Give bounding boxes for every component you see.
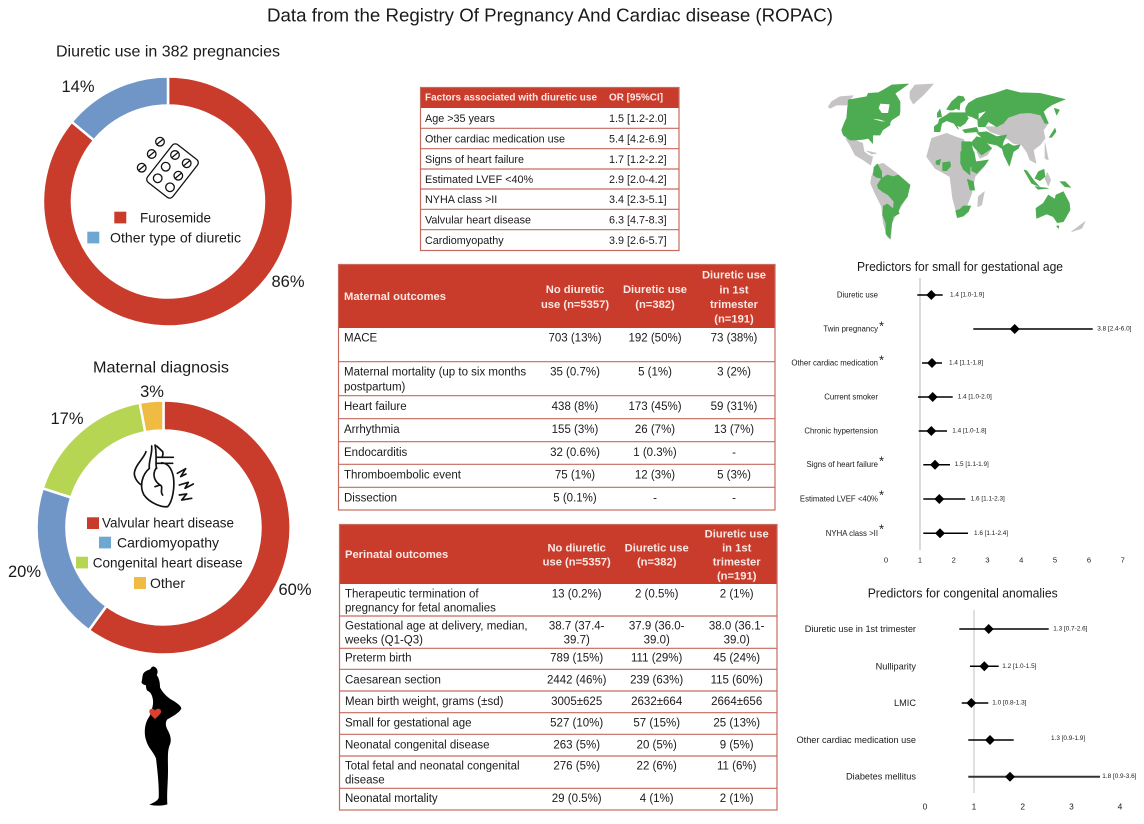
table header: (n=191) (714, 314, 754, 326)
table rows: 29 (0.5%) (552, 793, 602, 805)
forest plot rows: Nulliparity (876, 661, 916, 671)
table rows: 22 (6%) (637, 761, 677, 773)
table rows: 2442 (46%) (547, 674, 607, 686)
forest plot rows: 1.6 [1.1-2.4] (974, 530, 1008, 537)
x axis labels: 1 (972, 802, 977, 812)
table header: trimester (710, 299, 759, 311)
table rows: 12 (3%) (635, 470, 675, 482)
table rows: Signs of heart failure (425, 154, 524, 166)
table rows: NYHA class >II (425, 194, 497, 206)
label: 60%: 60% (278, 581, 312, 599)
table rows: Neonatal congenital disease (345, 739, 490, 751)
panel: predictors for small for gestational age (791, 260, 1132, 564)
forest plot rows: * (879, 352, 884, 368)
forest plot rows: NYHA class >II (826, 529, 878, 538)
table rows: 2.9 [2.0-4.2] (609, 174, 667, 186)
table rows: 39.0) (724, 634, 750, 646)
reference line at 1 (973, 610, 975, 793)
forest plot rows: 1.0 [0.8-1.3] (992, 700, 1027, 706)
table rows: 5 (3%) (717, 470, 751, 482)
table rows: 13 (0.2%) (552, 588, 602, 600)
forest plot rows: * (879, 318, 884, 334)
forest plot rows: 3.8 [2.4-6.0] (1097, 326, 1132, 332)
forest plot rows: 1.4 [1.0-2.0] (958, 394, 992, 400)
table rows: Preterm birth (345, 653, 411, 665)
table: perinatal outcomes (339, 524, 777, 810)
table rows: Mean birth weight, grams (±sd) (345, 696, 504, 708)
table rows: weeks (Q1-Q3) (344, 634, 423, 646)
label: 14%: 14% (61, 78, 95, 96)
table rows: disease (345, 775, 385, 787)
table rows: Heart failure (344, 401, 407, 413)
x axis labels: 4 (1019, 556, 1023, 564)
forest plot rows: Diabetes mellitus (846, 772, 916, 782)
heading: diuretic use: Diuretic use in 382 pregnancies (56, 44, 280, 60)
world map: participating countries (828, 84, 1085, 239)
table header: Diuretic use (625, 542, 689, 554)
table rows: 438 (8%) (552, 401, 598, 413)
table rows: 13 (7%) (714, 424, 754, 436)
table: maternal outcomes (338, 264, 775, 510)
x axis labels: 2 (952, 556, 956, 564)
table rows: 38.0 (36.1- (709, 621, 765, 633)
table rows (344, 588, 765, 805)
table rows: pregnancy for fetal anomalies (345, 602, 496, 614)
table rows: Valvular heart disease (425, 214, 531, 226)
icon: blister pack of pills (137, 137, 200, 200)
icon: heart with lightning (134, 445, 193, 507)
table rows: 35 (0.7%) (550, 367, 600, 379)
table rows: Small for gestational age (345, 718, 472, 730)
forest plot rows: 1.6 [1.1-2.3] (971, 496, 1005, 502)
table header: in 1st (722, 542, 752, 554)
label: 86%: 86% (271, 273, 305, 291)
table rows: 2 (1%) (720, 793, 754, 805)
table rows: 32 (0.6%) (550, 447, 600, 459)
forest plot rows: Signs of heart failure (806, 460, 878, 469)
forest plot rows: * (879, 488, 884, 502)
x axis labels: 3 (1069, 802, 1074, 812)
table: factors associated with diuretic use (420, 87, 679, 250)
donut chart: maternal diagnosis (37, 400, 291, 654)
table rows: 20 (5%) (637, 739, 677, 751)
table header: OR [95%CI] (609, 92, 663, 104)
table rows: 1.5 [1.2-2.0] (609, 113, 667, 125)
table header (420, 87, 679, 108)
legend: maternal diagnosis: Other (150, 575, 185, 591)
x axis labels: 0 (884, 556, 888, 564)
table rows (425, 113, 667, 247)
label: 3%: 3% (140, 383, 164, 401)
table rows: 59 (31%) (711, 401, 757, 413)
table header: Maternal outcomes (344, 291, 446, 303)
table header: Diuretic use (623, 284, 687, 296)
title: Data from the Registry Of Pregnancy And Cardiac disease (ROPAC) (267, 4, 833, 26)
x axis labels: 1 (918, 556, 922, 564)
forest plot rows: 1.4 [1.0-1.9] (950, 292, 984, 298)
forest plot rows: Diuretic use (837, 290, 878, 300)
table rows: Cardiomyopathy (425, 235, 504, 247)
forest plot rows: 1.2 [1.0-1.5] (1002, 663, 1037, 670)
table rows: 115 (60%) (711, 674, 763, 686)
forest plot rows: Diuretic use in 1st trimester (805, 624, 916, 634)
table rows: 2 (1%) (720, 588, 754, 600)
table rows: 57 (15%) (633, 718, 680, 730)
table rows: 2664±656 (711, 696, 762, 708)
table rows: postpartum) (344, 382, 406, 394)
table rows: 75 (1%) (555, 470, 595, 482)
table rows: - (732, 492, 736, 504)
table rows: 527 (10%) (550, 718, 603, 730)
table rows: 2 (0.5%) (635, 588, 679, 600)
table rows: 263 (5%) (553, 739, 600, 751)
x axis labels (884, 556, 1125, 564)
table rows: 73 (38%) (711, 333, 757, 345)
table rows: 192 (50%) (628, 333, 682, 345)
heading: small for gestational age: Predictors for small for gestational age (857, 260, 1063, 274)
table rows: Dissection (344, 492, 397, 504)
table rows: 5 (1%) (638, 367, 672, 379)
table rows: Neonatal mortality (345, 793, 438, 805)
table rows: 39.0) (644, 634, 670, 646)
table rows: 25 (13%) (713, 718, 760, 730)
table rows: Endocarditis (344, 447, 408, 459)
table rows: Gestational age at delivery, median, (345, 621, 528, 633)
legend: maternal diagnosis (76, 515, 243, 591)
x axis labels (923, 802, 1123, 812)
table header: Diuretic use (702, 269, 766, 281)
table rows: - (653, 492, 657, 504)
reference line at 1 (919, 278, 921, 550)
forest plot rows: 1.4 [1.1-1.8] (949, 360, 983, 366)
table header: use (n=5357) (541, 299, 609, 311)
donut chart: diuretic types (43, 76, 293, 327)
x axis labels: 0 (923, 802, 928, 812)
table rows: Total fetal and neonatal congenital (345, 761, 520, 773)
table rows: 276 (5%) (553, 761, 600, 773)
table header: (n=382) (637, 556, 677, 568)
table rows: 26 (7%) (635, 424, 675, 436)
panel: predictors for congenital anomalies (796, 587, 1137, 812)
table rows: 1.7 [1.2-2.2] (609, 154, 667, 166)
table rows: Arrhythmia (344, 424, 400, 436)
table rows: 11 (6%) (717, 761, 757, 773)
table rows: Other cardiac medication use (425, 134, 565, 146)
table rows: 703 (13%) (548, 333, 602, 345)
table header: No diuretic (547, 542, 606, 554)
table rows: 39.7) (564, 634, 590, 646)
table rows: Therapeutic termination of (345, 588, 479, 600)
table header: trimester (713, 556, 761, 568)
table rows: 45 (24%) (713, 653, 760, 665)
table header: Diuretic use (705, 529, 769, 541)
table rows: 789 (15%) (550, 653, 603, 665)
table rows: 3005±625 (551, 696, 602, 708)
forest plot rows: 1.4 [1.0-1.8] (952, 428, 987, 434)
table header: (n=382) (635, 299, 675, 311)
forest plot rows: Other cardiac medication use (796, 735, 916, 745)
x axis labels: 4 (1118, 802, 1123, 812)
label: 20%: 20% (8, 563, 41, 581)
table header: Perinatal outcomes (345, 549, 448, 561)
legend: diuretic types (87, 210, 241, 246)
table rows: Estimated LVEF <40% (425, 174, 534, 186)
label: 17%: 17% (50, 410, 84, 428)
table header (338, 264, 775, 328)
table rows: 111 (29%) (631, 653, 683, 665)
table rows: - (732, 447, 736, 459)
panel: maternal diagnosis donut (8, 360, 312, 654)
table header: Factors associated with diuretic use (425, 92, 597, 104)
table rows: 1 (0.3%) (633, 447, 677, 459)
heading: congenital anomalies: Predictors for congenital anomalies (868, 587, 1058, 601)
table header (339, 524, 777, 584)
table rows: 9 (5%) (720, 739, 754, 751)
table header: (n=191) (717, 570, 757, 582)
table rows: 3 (2%) (717, 367, 751, 379)
table header: use (n=5357) (543, 556, 611, 568)
icon: pregnant woman silhouette with heart (141, 666, 181, 806)
table rows: 173 (45%) (628, 401, 682, 413)
x axis labels: 3 (985, 556, 990, 564)
forest plot rows: Other cardiac medication (791, 358, 878, 368)
x axis labels: 6 (1087, 556, 1091, 564)
heading: maternal diagnosis: Maternal diagnosis (93, 360, 229, 376)
legend: diuretic types: Furosemide (140, 210, 211, 226)
legend: diuretic types: Other type of diuretic (110, 230, 241, 246)
table rows (344, 333, 757, 504)
table rows: 155 (3%) (552, 424, 598, 436)
legend: maternal diagnosis: Valvular heart disease (102, 515, 234, 531)
table rows: 37.9 (36.0- (629, 621, 685, 633)
table header: in 1st (719, 284, 749, 296)
table rows: 6.3 [4.7-8.3] (609, 214, 667, 226)
x axis labels: 5 (1053, 556, 1057, 564)
forest plot rows: Estimated LVEF <40% (800, 494, 878, 504)
table rows: MACE (344, 333, 378, 345)
forest plot rows: Chronic hypertension (804, 426, 878, 436)
forest plot rows: 1.5 [1.1-1.9] (955, 461, 989, 468)
table rows: 5.4 [4.2-6.9] (609, 134, 667, 146)
table rows: Thromboembolic event (344, 470, 462, 482)
panel: diuretic use donut (43, 44, 305, 327)
table rows: Age >35 years (425, 113, 496, 125)
forest plot rows (796, 624, 1137, 782)
table header: No diuretic (546, 284, 604, 296)
table rows: 3.4 [2.3-5.1] (609, 194, 667, 206)
forest plot rows: LMIC (894, 698, 916, 708)
table rows: 2632±664 (631, 696, 683, 708)
forest plot rows: * (879, 522, 884, 536)
table rows: 38.7 (37.4- (549, 621, 605, 633)
forest plot rows: 1.8 [0.9-3.6] (1102, 773, 1137, 780)
forest plot rows: Twin pregnancy (823, 324, 878, 334)
forest plot rows: * (879, 454, 884, 468)
legend: maternal diagnosis: Congenital heart disease (93, 555, 243, 571)
forest plot rows: Current smoker (824, 392, 878, 402)
table rows: 4 (1%) (640, 793, 674, 805)
table rows: Maternal mortality (up to six months (344, 367, 526, 379)
forest plot rows (791, 290, 1132, 538)
forest plot rows: 1.3 [0.9-1.9] (1051, 735, 1085, 742)
x axis labels: 2 (1020, 802, 1025, 812)
legend: maternal diagnosis: Cardiomyopathy (117, 535, 219, 551)
forest plot rows: 1.3 [0.7-2.6] (1053, 626, 1088, 632)
table rows: 5 (0.1%) (553, 492, 597, 504)
table rows: 3.9 [2.6-5.7] (609, 235, 667, 247)
table rows: 239 (63%) (630, 674, 683, 686)
x axis labels: 7 (1121, 556, 1125, 564)
table rows: Caesarean section (345, 674, 441, 686)
